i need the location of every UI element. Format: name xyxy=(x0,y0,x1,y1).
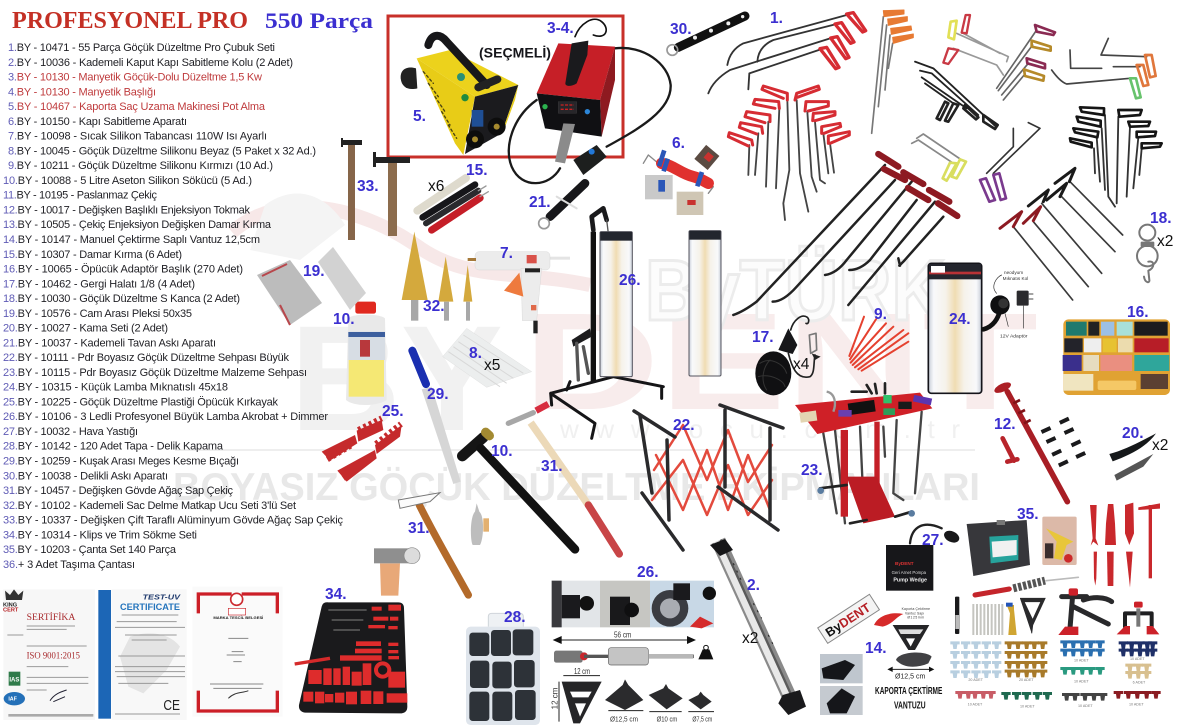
icon: glue gun blister xyxy=(1042,517,1077,565)
icon: silicone glue sticks xyxy=(443,328,532,387)
parts list: 34.BY - 10314 - Klips ve Trim Sökme Seti xyxy=(3,529,197,541)
dimensions: cups: Ø7,5 cm xyxy=(692,715,712,724)
labels: tab quantities: 20 ADET xyxy=(1019,678,1034,682)
parts list: 22.BY - 10111 - Pdr Boyasız Göçük Düzeltme Sehpası Büyük xyxy=(3,352,290,364)
labels: tab quantities: 10 ADET xyxy=(1074,658,1089,662)
panel: CE certificate: TEST-UV xyxy=(143,594,182,601)
icon: door fixing tool xyxy=(643,145,719,215)
vantuz title: VANTUZU xyxy=(894,700,926,711)
item number labels: 27. xyxy=(922,532,944,549)
icon: S hook xyxy=(1137,225,1158,282)
panel: ISO certificate: KING xyxy=(3,603,18,609)
dimension: 56 cm xyxy=(553,629,696,644)
hammer 33 xyxy=(341,138,410,240)
panel: ISO certificate: ISO 9001:2015 xyxy=(27,650,80,661)
icon: mallet black tips xyxy=(1041,417,1086,467)
item number labels: 21. xyxy=(529,194,551,211)
parts list: 18.BY - 10030 - Göçük Düzeltme S Kanca (2 Adet) xyxy=(3,293,240,305)
panel: ISO certificate: SERTİFİKA xyxy=(27,611,75,623)
icon: vantuz flame badge xyxy=(874,613,903,627)
icon: wood handle hammer xyxy=(398,493,468,595)
parts list: 27.BY - 10032 - Hava Yastığı xyxy=(3,426,138,438)
background watermark logo: ByTÜRK xyxy=(645,243,945,339)
item number labels: 6. xyxy=(672,135,685,152)
rods: black bent set xyxy=(915,62,998,129)
quantity labels: x2 xyxy=(1152,437,1168,454)
parts list: 25.BY - 10225 - Göçük Düzeltme Plastiği Öpücük Kırkayak xyxy=(3,396,278,408)
item number labels: 25. xyxy=(382,403,404,420)
parts list: 23.BY - 10115 - Pdr Boyasız Göçük Düzeltme Malzeme Sehpası xyxy=(3,367,307,379)
icon: suction cup puller xyxy=(887,625,934,681)
panel: CE certificate xyxy=(98,589,187,720)
vantuz note xyxy=(902,607,930,620)
parts list: 19.BY - 10576 - Cam Arası Pleksi 50x35 xyxy=(3,308,192,320)
parts list: 26.BY - 10106 - 3 Ledli Profesyonel Büyük Lamba Akrobat + Dimmer xyxy=(3,411,328,423)
rods: red fan set xyxy=(728,86,849,220)
icon: air wedge pump: Pump Wedge xyxy=(893,577,927,583)
panel: trademark certificate xyxy=(192,587,283,717)
dimension: 56 cm: 56 cm xyxy=(614,629,631,639)
parts list: 21.BY - 10037 - Kademeli Tavan Askı Aparatı xyxy=(3,337,216,349)
icon: perforated hanger strap xyxy=(667,15,745,55)
rods: red long set xyxy=(708,13,866,93)
dimensions: cups: Ø10 cm xyxy=(657,715,677,724)
icon: second double hammer xyxy=(373,152,410,236)
icon: carrying case xyxy=(967,520,1030,576)
icon: dark frames xyxy=(634,405,783,550)
quantity labels: x5 xyxy=(484,357,500,374)
icon: pole top cap xyxy=(710,539,733,556)
item number labels: 33. xyxy=(357,178,379,195)
icon: machine controller xyxy=(573,145,607,175)
vantuz title: KAPORTA ÇEKTİRME xyxy=(875,684,943,697)
lower right kit xyxy=(818,503,1161,715)
labels: tab quantities: 20 ADET xyxy=(968,678,984,682)
logo: ByDENT: ByDENT xyxy=(823,600,873,640)
parts list: 9.BY - 10211 - Göçük Düzeltme Silikonu Kırmızı (10 Ad.) xyxy=(8,160,273,172)
parts list: 31.BY - 10457 - Değişken Gövde Ağaç Sap Çekiç xyxy=(3,485,234,497)
icon: red silicone sticks xyxy=(849,317,908,371)
item number labels: 12. xyxy=(994,416,1016,433)
icon: ceiling hanger strap xyxy=(539,183,585,229)
icon: lamp magnet arm and adaptor: Mıknatıs Kol xyxy=(1003,276,1028,281)
rods: orange set xyxy=(872,10,913,133)
icon: long pole xyxy=(717,540,806,715)
dimensions: cups xyxy=(550,667,714,724)
panel: ISO certificate: IAF xyxy=(8,697,18,703)
vantuz note: Kaporta Çektirme xyxy=(902,607,930,611)
parts list: 12.BY - 10017 - Değişken Başlıklı Enjeksiyon Tokmak xyxy=(3,204,251,216)
background watermark logo xyxy=(173,194,1038,509)
dimensions: cups: Ø12,5 cm xyxy=(610,715,638,724)
rods: black fan set xyxy=(1070,107,1162,207)
icon: rubber hammer xyxy=(462,432,575,549)
quantity labels: x6 xyxy=(428,178,444,195)
dent rods xyxy=(708,10,1162,315)
icon: damar kirma sticks xyxy=(417,178,488,230)
lamp stand and middle tools xyxy=(322,208,721,596)
icon: injection mallet xyxy=(993,380,1067,502)
icon: acetone bottle xyxy=(346,302,387,405)
rods: small coloured set xyxy=(943,15,1008,75)
item number labels: 20. xyxy=(1122,425,1144,442)
parts list: 6.BY - 10150 - Kapı Sabitleme Aparatı xyxy=(8,116,187,128)
item number labels: 32. xyxy=(423,298,445,315)
plexi panels xyxy=(257,247,366,325)
item number labels: 15. xyxy=(466,162,488,179)
top centre machines and small tools xyxy=(401,15,745,230)
title: 550 Parça xyxy=(265,8,373,33)
item number labels: 24. xyxy=(949,311,971,328)
parts list: 10.BY - 10088 - 5 Litre Aseton Silikon Sökücü (5 Ad.) xyxy=(3,175,252,187)
rods: pale yellow set xyxy=(912,134,966,181)
parts list: 28.BY - 10142 - 120 Adet Tapa - Delik Kapama xyxy=(3,441,224,453)
labels: tab quantities: 10 ADET xyxy=(968,702,983,706)
certificates and kit xyxy=(3,587,407,720)
icon: hot glue gun xyxy=(468,252,570,333)
item number labels xyxy=(303,10,1172,657)
icon: red trim tools xyxy=(1090,503,1160,588)
item number labels: 31. xyxy=(541,458,563,475)
icon: suction cup puller: Ø12,5 cm xyxy=(895,674,925,681)
icon: acrobat lamp with stand xyxy=(551,208,721,438)
background watermark logo: BY xyxy=(290,294,503,462)
labels: tab quantities: 10 ADET xyxy=(1074,680,1089,684)
rods: maroon and gold set xyxy=(997,25,1055,100)
icon: gergi rope xyxy=(755,316,821,395)
parts list: 20.BY - 10027 - Kama Seti (2 Adet) xyxy=(3,323,168,335)
magnet lamp and right side items xyxy=(755,263,1170,523)
quantity labels xyxy=(428,178,1173,647)
parts list: 35.BY - 10203 - Çanta Set 140 Parça xyxy=(3,544,177,556)
labels: tab quantities: 10 ADET xyxy=(1130,657,1145,661)
panel: trademark certificate: MARKA TESCİL BELGESİ xyxy=(213,615,263,620)
parts list: 32.BY - 10102 - Kademeli Sac Delme Matkap Ucu Seti 3'lü Set xyxy=(3,500,296,512)
item number labels: 5. xyxy=(413,108,426,125)
parts list: 30.BY - 10038 - Delikli Askı Aparatı xyxy=(3,470,168,482)
parts list: 15.BY - 10307 - Damar Kırma (6 Adet) xyxy=(3,249,182,261)
icon: air wedge pump: Geri Arnet Pompa xyxy=(892,570,927,575)
icon: small magnetic lamp xyxy=(928,263,982,393)
icon: slide hammer xyxy=(554,645,713,665)
dimensions: cups: 12 cm xyxy=(550,687,559,709)
item number labels: 7. xyxy=(500,245,513,262)
panel: ISO certificate: IAS xyxy=(9,678,19,684)
rods: T-handle set xyxy=(733,154,957,315)
icon: red scissor lattice xyxy=(652,425,772,515)
icon: glue sticks and spray xyxy=(973,603,1017,635)
labels: tab quantities: 10 ADET xyxy=(1129,702,1144,706)
icon: adapter organizer case xyxy=(1063,319,1170,395)
icon: PDR material cart xyxy=(795,383,932,523)
vantuz note: Ø125mm xyxy=(907,616,924,620)
icon: marker xyxy=(955,597,959,634)
title: PROFESYONEL PRO xyxy=(12,8,248,34)
icon: trim removal kit xyxy=(295,602,407,713)
parts list: 29.BY - 10259 - Kuşak Arası Meges Kesme Bıçağı xyxy=(3,456,239,468)
parts list: 5.BY - 10467 - Kaporta Saç Uzama Makinesi Pot Alma xyxy=(8,101,266,113)
icon: air wedge pump: ByDENT xyxy=(895,561,914,566)
quantity labels: x4 xyxy=(793,356,810,373)
background watermark logo: DENT xyxy=(523,285,1038,439)
parts list: 33.BY - 10337 - Değişken Çift Taraflı Alüminyum Gövde Ağaç Sap Çekiç xyxy=(3,515,344,527)
label: selectable: (SEÇMELİ) xyxy=(479,44,551,60)
item number labels: 30. xyxy=(670,21,692,38)
icon: step drill bits xyxy=(402,232,472,321)
icon: clamp pullers xyxy=(1058,588,1159,635)
icons: adapter tabs xyxy=(950,640,1161,701)
icon: knife xyxy=(412,351,461,484)
icon: mini triangle handle xyxy=(1020,598,1045,633)
item number labels: 3-4. xyxy=(547,20,574,37)
item number labels: 19. xyxy=(303,263,325,280)
icon: first double hammer xyxy=(341,138,362,240)
item number labels: 9. xyxy=(874,306,887,323)
icon: red magnetic dent puller xyxy=(509,19,671,183)
item number labels: 10. xyxy=(333,311,355,328)
icon: plug organizer box xyxy=(466,613,540,725)
icon: small metal canister xyxy=(471,503,489,545)
panel: optional machines frame xyxy=(388,16,623,157)
parts list: 7.BY - 10098 - Sıcak Silikon Tabancası 110W Isı Ayarlı xyxy=(8,131,267,143)
icon: lamp magnet arm and adaptor: neodyum xyxy=(1004,270,1023,275)
dimensions: cups: 12 cm xyxy=(574,667,590,676)
panel: ISO certificate: CERT xyxy=(3,607,19,613)
parts list: 36.+ 3 Adet Taşıma Çantası xyxy=(3,559,135,571)
icon: triangle handle and cups xyxy=(562,679,712,723)
item number labels: 26. xyxy=(619,272,641,289)
labels: tab quantities: 10 ADET xyxy=(1020,705,1035,709)
vantuz title xyxy=(875,684,943,711)
item number labels: 26. xyxy=(637,564,659,581)
item number labels: 1. xyxy=(770,10,783,27)
labels: tab quantities: 10 ADET xyxy=(1078,704,1093,708)
parts list: 16.BY - 10065 - Öpücük Adaptör Başlık (270 Adet) xyxy=(3,264,243,276)
parts list: 2.BY - 10036 - Kademeli Kaput Kapı Sabitleme Kolu (2 Adet) xyxy=(8,57,293,69)
icon: wedge set xyxy=(1109,433,1156,481)
icon: wood handle puller hammer xyxy=(508,404,619,554)
panel: CE certificate: CE xyxy=(163,698,180,714)
item number labels: 17. xyxy=(752,329,774,346)
item number labels: 34. xyxy=(325,586,347,603)
icon: lamp magnet arm and adaptor: 12V Adaptör xyxy=(1000,334,1028,340)
parts list: 4.BY - 10130 - Manyetik Başlığı xyxy=(8,86,156,98)
icon: usage photos xyxy=(552,581,716,628)
icon: yellow pot welding machine xyxy=(401,36,518,155)
item number labels: 29. xyxy=(427,386,449,403)
icon: small slide puller xyxy=(975,577,1078,595)
item number labels: 31. xyxy=(408,520,430,537)
title xyxy=(12,8,373,34)
item number labels: 28. xyxy=(504,609,526,626)
folding rack xyxy=(634,405,783,550)
item number labels: 23. xyxy=(801,462,823,479)
parts list: 14.BY - 10147 - Manuel Çektirme Saplı Vantuz 12,5cm xyxy=(3,234,260,246)
rods: orange and green L set xyxy=(1052,38,1156,98)
quantity labels: x2 xyxy=(1157,233,1173,250)
quantity labels: x2 xyxy=(742,630,758,647)
bottom centre tools xyxy=(466,540,806,725)
item number labels: 22. xyxy=(673,417,695,434)
labels: tab quantities xyxy=(968,657,1146,709)
parts list: 24.BY - 10315 - Küçük Lamba Mıknatıslı 45x18 xyxy=(3,382,228,394)
vantuz note: Vantuz Sapı xyxy=(905,611,924,615)
parts list: 13.BY - 10505 - Çekiç Enjeksiyon Değişken Damar Kırma xyxy=(3,219,272,231)
labels: tab quantities: 6 ADET xyxy=(1133,680,1146,684)
parts list: 8.BY - 10045 - Göçük Düzeltme Silikonu Beyaz (5 Paket x 32 Ad.) xyxy=(8,145,316,157)
panel: CE certificate: CERTIFICATE xyxy=(120,602,180,612)
item number labels: 2. xyxy=(747,577,760,594)
logo: ByDENT xyxy=(818,594,879,643)
panel: ISO certificate xyxy=(3,589,95,720)
icon: ball hammer xyxy=(374,548,420,596)
rods: purple set xyxy=(980,123,1040,202)
item number labels: 35. xyxy=(1017,506,1039,523)
icon: air wedge pump xyxy=(886,525,961,591)
item number labels: 10. xyxy=(491,443,513,460)
icon: lamp magnet arm and adaptor xyxy=(983,270,1033,340)
parts list: 17.BY - 10462 - Gergi Halatı 1/8 (4 Adet) xyxy=(3,278,195,290)
item number labels: 18. xyxy=(1150,210,1172,227)
parts list: 3.BY - 10130 - Manyetik Göçük-Dolu Düzeltme 1,5 Kw xyxy=(8,72,262,84)
icon: vantuz usage photos xyxy=(820,654,863,715)
item number labels: 16. xyxy=(1127,304,1149,321)
background watermark logo: www.ocu.com.tr xyxy=(559,414,960,444)
parts list: 11.BY - 10195 - Paslanmaz Çekiç xyxy=(3,190,158,202)
parts list: 1.BY - 10471 - 55 Parça Göçük Düzeltme Pro Çubuk Seti xyxy=(8,42,275,54)
item number labels: 8. xyxy=(469,345,482,362)
background watermark logo: BOYASIZ GÖÇÜK DÜZELTME EKİPMANLARI xyxy=(173,466,980,509)
parts list xyxy=(3,42,344,571)
icon: plastic combs xyxy=(322,418,402,482)
rods: long straight set xyxy=(1000,168,1123,300)
item number labels: 14. xyxy=(865,640,887,657)
